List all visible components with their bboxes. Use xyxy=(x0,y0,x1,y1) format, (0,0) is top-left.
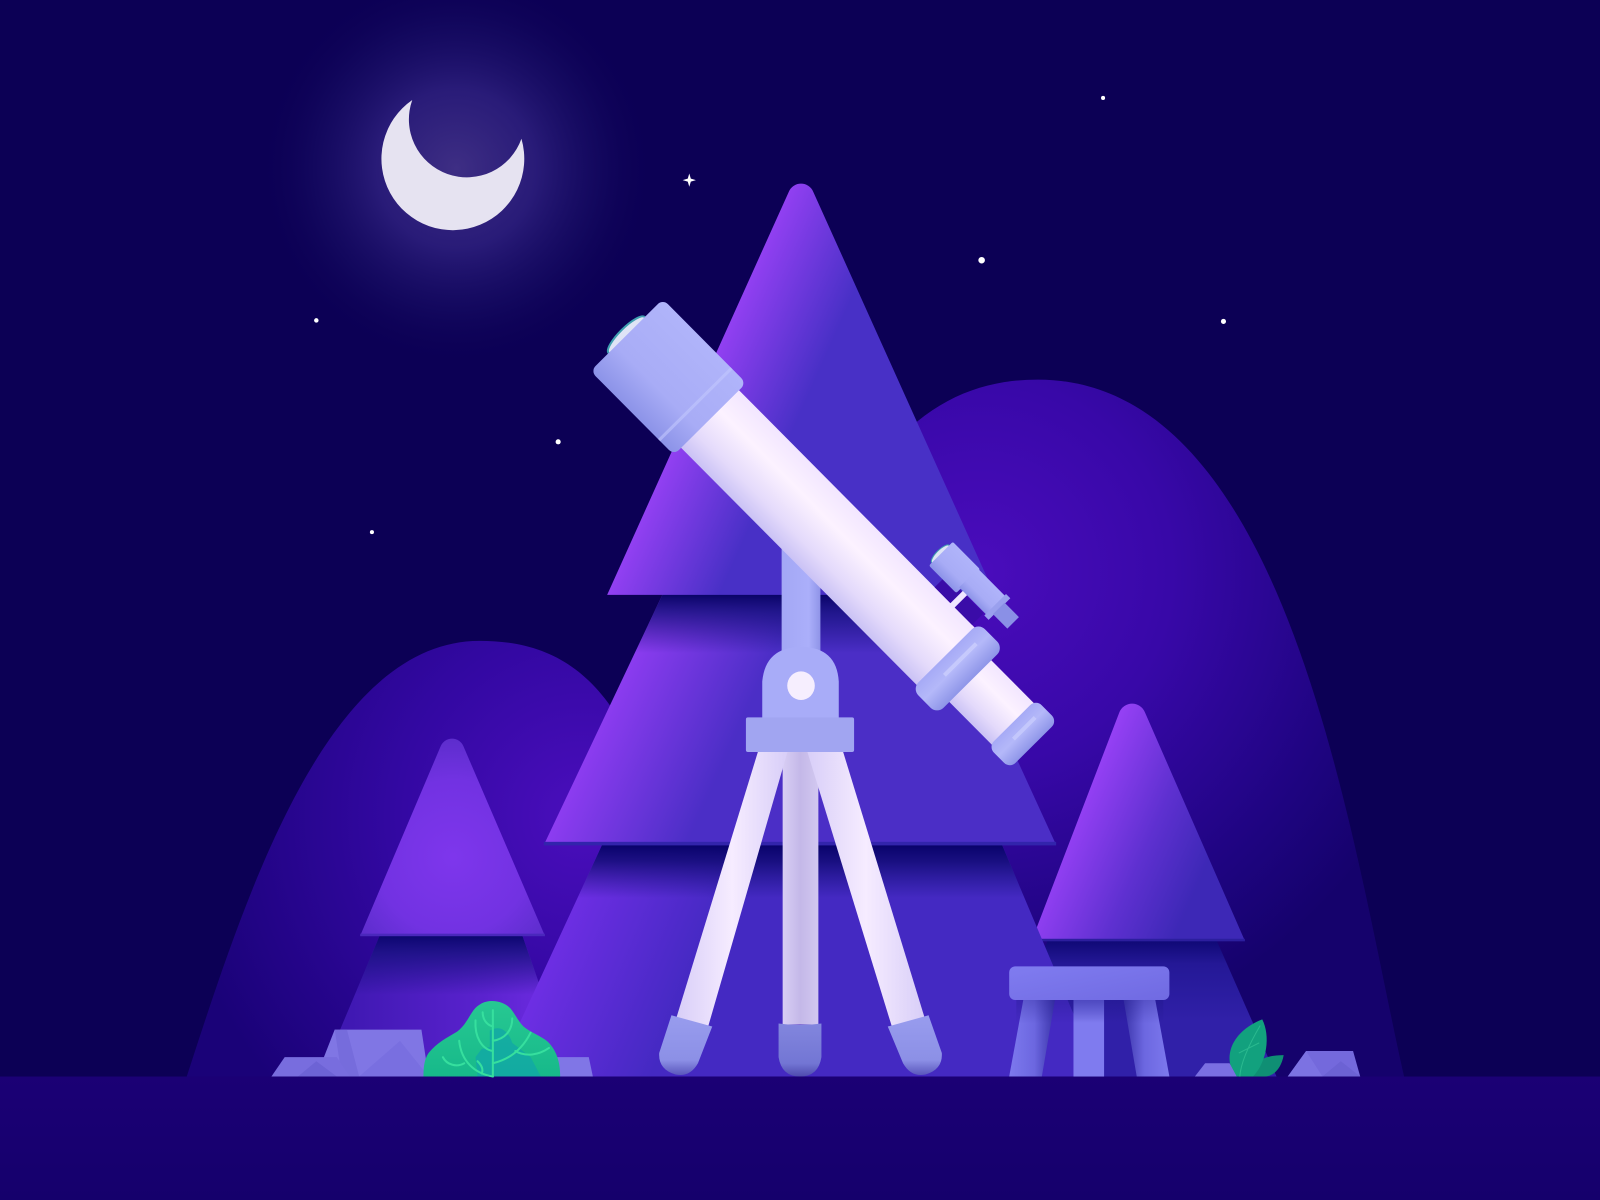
main tube xyxy=(675,384,985,695)
tripod centre leg xyxy=(783,751,818,1024)
hub pin xyxy=(787,671,815,700)
tree tier 1 xyxy=(607,184,995,595)
stars xyxy=(314,96,1226,534)
eyepiece cap xyxy=(590,299,746,455)
ring xyxy=(912,623,1004,714)
end cap xyxy=(988,699,1058,769)
finder gap shadow xyxy=(935,576,984,625)
leaves: right xyxy=(1230,1019,1284,1077)
hill: right xyxy=(612,380,1404,1077)
tripod left leg xyxy=(677,751,788,1027)
tree tier 3 xyxy=(495,845,1100,1077)
mount hub xyxy=(762,647,839,720)
stool legs xyxy=(1009,999,1055,1077)
bush veins xyxy=(443,1010,549,1077)
ground xyxy=(0,1077,1600,1200)
small tree: right xyxy=(995,704,1277,1077)
tripod right foot xyxy=(888,1015,942,1075)
hill: left xyxy=(187,641,735,1077)
front lens xyxy=(604,312,650,358)
finder scope xyxy=(926,538,1024,637)
stool seat xyxy=(1009,966,1169,1000)
rocks: right xyxy=(1195,1051,1360,1077)
tripod centre foot xyxy=(779,1023,821,1077)
finder support xyxy=(949,590,968,609)
moon glow xyxy=(257,0,655,367)
tripod right leg xyxy=(807,751,924,1027)
rocks: left xyxy=(271,1030,593,1077)
small tree: left xyxy=(320,739,571,1077)
stool xyxy=(1009,966,1169,1077)
mount post xyxy=(782,541,820,668)
tree tier 2 xyxy=(544,593,1056,845)
moon xyxy=(381,100,524,230)
telescope optical tube xyxy=(585,269,1095,781)
tripod left foot xyxy=(659,1015,712,1075)
mount base xyxy=(746,717,854,752)
telescope xyxy=(585,269,1095,1077)
narrow tube section xyxy=(931,642,1038,749)
bush teal centre xyxy=(476,1028,541,1077)
bush xyxy=(423,1001,560,1077)
main tree xyxy=(495,184,1100,1077)
